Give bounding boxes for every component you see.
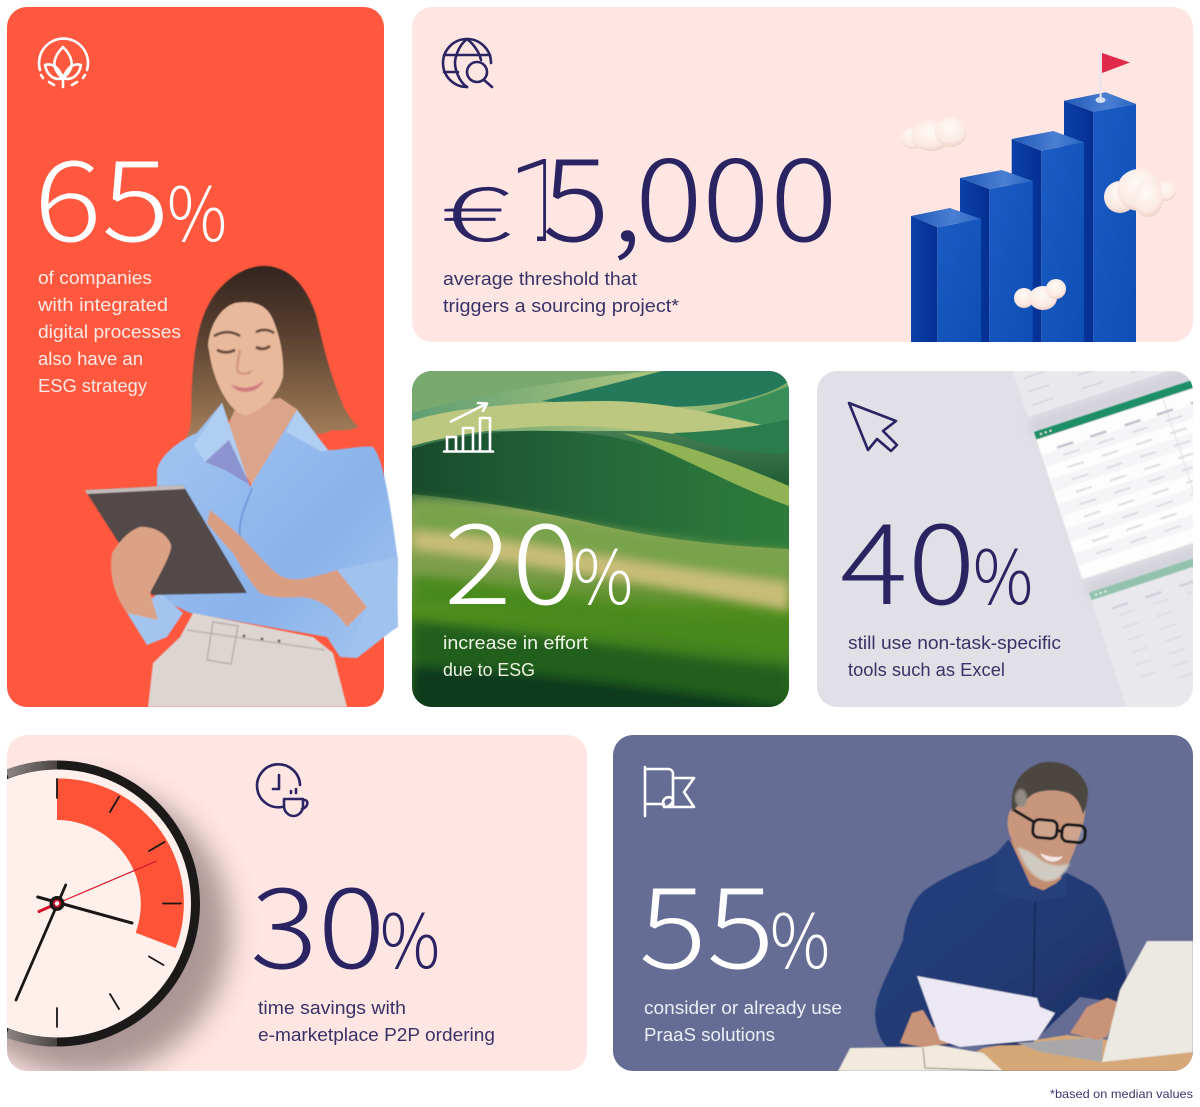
- icon: leaf in circle: [39, 39, 88, 87]
- big number: 20 percent: %: [573, 517, 633, 626]
- panel: 15,000 euro threshold: [412, 7, 1193, 342]
- big number: 15,000 euros: 1: [504, 138, 585, 268]
- big number: 30 percent: 30: [250, 839, 385, 1001]
- big number: 55 percent: %: [770, 881, 830, 990]
- text: effort description: due to ESG: [443, 659, 535, 680]
- icon: cursor arrow: [849, 403, 897, 451]
- footnote: *based on median values: [1050, 1087, 1193, 1101]
- text: threshold description: [443, 268, 679, 316]
- big number: 40 percent: %: [973, 517, 1033, 626]
- icon: globe with magnifier: [443, 39, 492, 87]
- big number: 40 percent: 40: [840, 475, 975, 637]
- big number: 65 percent: %: [167, 154, 227, 263]
- text: companies description: digital processes: [38, 321, 181, 342]
- panel: 30% time savings: [0, 735, 587, 1076]
- text: savings description: time savings with: [258, 997, 406, 1018]
- text: PraaS description: [644, 997, 842, 1045]
- big number: 15,000 euros: [444, 158, 831, 261]
- text: savings description: [258, 997, 495, 1045]
- text: threshold description: average threshold that: [443, 268, 637, 289]
- text: companies description: ESG strategy: [38, 375, 148, 396]
- text: companies description: [37, 267, 181, 396]
- panel: 65% companies with ESG strategy: [7, 7, 398, 707]
- illustration: 3D bar chart with flag: [901, 53, 1176, 342]
- text: tools description: [848, 632, 1061, 680]
- panel: 40% non-task-specific tools: [817, 371, 1193, 707]
- big number: 20 percent: 20: [444, 475, 579, 637]
- text: tools description: still use non-task-specific: [848, 632, 1061, 653]
- big number: 15,000 euros: €: [441, 154, 511, 263]
- text: companies description: also have an: [38, 348, 143, 369]
- text: companies description: of companies: [38, 267, 152, 288]
- big number: 15,000 euros: 5,000: [542, 112, 838, 274]
- panel: 55% PraaS: [613, 735, 1193, 1071]
- text: threshold description: triggers a sourcing project*: [443, 295, 679, 316]
- icon: rising bar chart: [444, 403, 493, 452]
- text: PraaS description: consider or already use: [644, 997, 842, 1018]
- panel: 20% effort increase: [412, 371, 789, 721]
- big number: 55 percent: 55: [639, 839, 774, 1001]
- illustration: wall clock: [0, 764, 230, 1076]
- icon: flags: [645, 767, 694, 816]
- big number: 65 percent: 65: [34, 112, 169, 274]
- text: tools description: tools such as Excel: [848, 659, 1005, 680]
- icon: clock with coffee cup: [257, 764, 307, 816]
- text: effort description: [443, 632, 588, 680]
- illustration: spreadsheet windows: [1031, 372, 1193, 609]
- big number: 30 percent: %: [380, 881, 440, 990]
- text: PraaS description: PraaS solutions: [644, 1024, 775, 1045]
- text: companies description: with integrated: [37, 294, 168, 315]
- photo: man at laptop: [838, 762, 1193, 1071]
- photo: woman with tablet: [85, 266, 398, 707]
- text: effort description: increase in effort: [443, 632, 588, 653]
- text: savings description: e-marketplace P2P ordering: [258, 1024, 495, 1045]
